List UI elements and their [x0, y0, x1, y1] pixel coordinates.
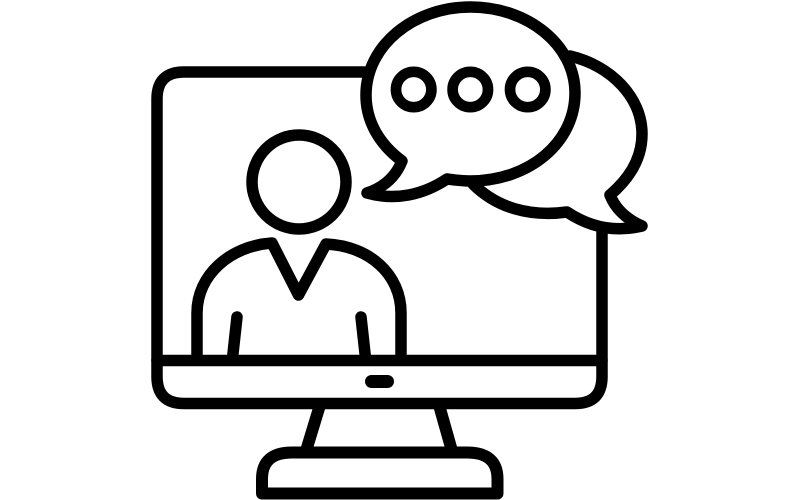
chat dots — [396, 72, 545, 107]
monitor button — [365, 375, 394, 388]
person — [197, 135, 401, 358]
monitor screen and body — [157, 72, 602, 404]
front speech bubble — [366, 7, 575, 197]
monitor stand — [262, 405, 498, 494]
back speech bubble — [473, 56, 642, 229]
